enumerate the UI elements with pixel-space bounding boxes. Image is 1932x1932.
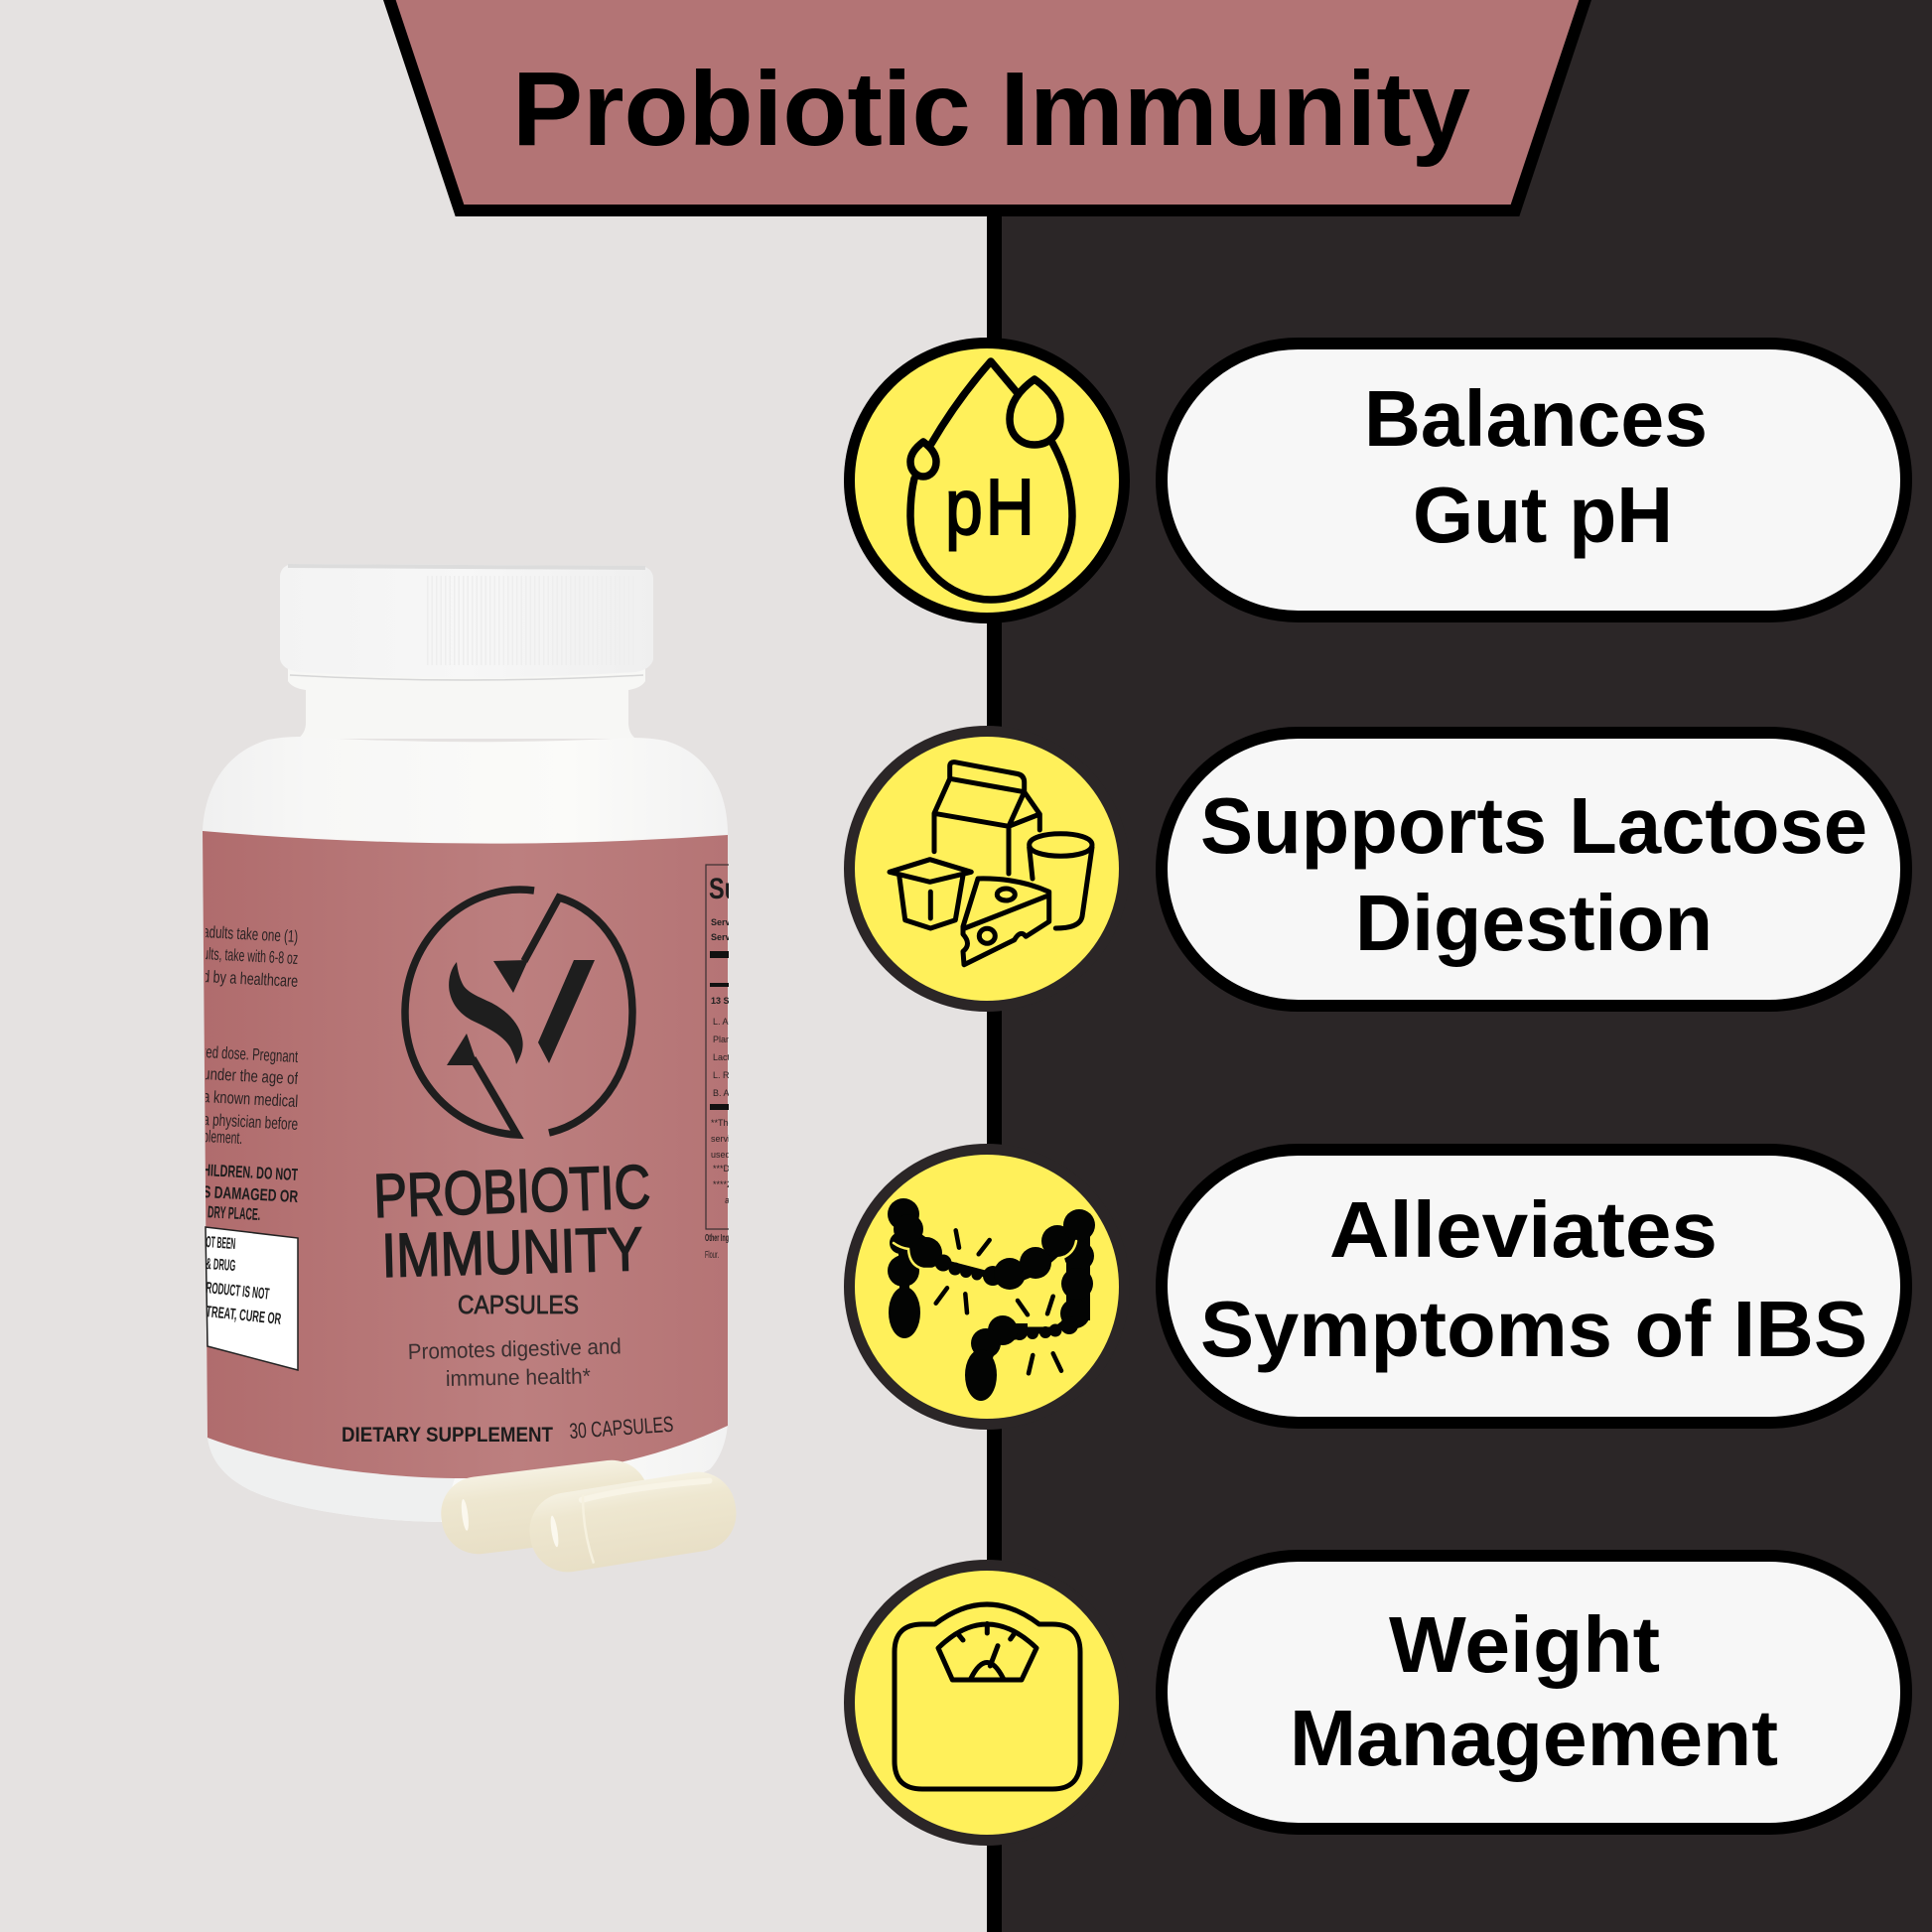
supplement facts panel: used for [711, 1150, 744, 1160]
bottle base shadow [207, 1438, 455, 1522]
icon: IBS colon circle [850, 1150, 1124, 1424]
directions small text: HILDREN. DO NOT [203, 1161, 299, 1184]
capsules label: CAPSULES [458, 1290, 579, 1319]
bottle neck [288, 667, 645, 739]
tagline: Promotes digestive and [407, 1333, 621, 1364]
supplement facts panel: Lactis [713, 1052, 737, 1062]
supplement facts panel: L. Acid [713, 1017, 740, 1027]
tagline [407, 1333, 621, 1391]
pill: alleviates symptoms of IBS: Alleviates [1329, 1185, 1718, 1274]
yogurt pot [890, 860, 971, 928]
tagline: immune health* [446, 1363, 591, 1391]
directions small text: , DRY PLACE. [203, 1202, 261, 1224]
pill: weight management: Management [1290, 1694, 1778, 1782]
logo [405, 890, 632, 1135]
supplement facts panel: Plantar [713, 1035, 742, 1044]
bottle body [203, 737, 728, 1522]
icon: dairy products circle [850, 731, 1124, 1007]
directions small text: ted dose. Pregnant [203, 1042, 299, 1066]
pain ticks [936, 1230, 1061, 1373]
supplement facts panel: ****20 B [713, 1179, 746, 1189]
FDA disclaimer box: TREAT, CURE OR [206, 1304, 282, 1328]
product bottle [203, 564, 749, 1578]
supplement facts panel [705, 864, 729, 1230]
pill: alleviates symptoms of IBS [1162, 1150, 1906, 1423]
FDA disclaimer box: & DRUG [206, 1256, 236, 1275]
icon: pH droplet circle [850, 344, 1124, 618]
supplement facts panel: B. Anim [713, 1088, 744, 1098]
milk carton [934, 762, 1039, 874]
colon highlights [894, 1241, 1076, 1269]
title: Probiotic Immunity [512, 51, 1470, 168]
right dark background [1002, 0, 1932, 1932]
dietary supplement: DIETARY SUPPLEMENT [342, 1424, 553, 1447]
icon: weighing scale circle [850, 1565, 1124, 1841]
other ingredients text: Other Ing [705, 1233, 729, 1244]
supplement facts panel: at [725, 1195, 733, 1205]
weighing scale [895, 1604, 1080, 1789]
product name: IMMUNITY [381, 1215, 643, 1291]
supplement facts panel: ***Daily [713, 1164, 744, 1173]
center divider line [987, 199, 1002, 1932]
directions small text: adults take one (1) [203, 922, 299, 946]
FDA disclaimer box: RODUCT IS NOT [206, 1280, 270, 1304]
pill: balances gut pH [1162, 344, 1906, 617]
directions small text: a known medical [203, 1087, 299, 1111]
FDA disclaimer box: OT BEEN [206, 1234, 236, 1253]
other ingredients text [705, 1233, 729, 1261]
directions small text: ults, take with 6-8 oz [203, 944, 299, 968]
left light background [0, 0, 993, 1932]
pill: alleviates symptoms of IBS: Symptoms of IBS [1200, 1285, 1867, 1373]
product name [372, 1153, 651, 1291]
directions small text: under the age of [203, 1064, 299, 1088]
directions small text: d by a healthcare [203, 967, 299, 991]
pH text: pH [945, 463, 1037, 551]
supplement facts panel: Serving [711, 932, 744, 942]
product name: PROBIOTIC [372, 1153, 651, 1231]
supplement facts panel: L. Reu [713, 1070, 740, 1080]
bottle cap [280, 564, 653, 680]
bottle label [203, 831, 749, 1478]
pill: supports lactose digestion: Digestion [1355, 879, 1713, 967]
supplement facts panel: Serving [711, 917, 744, 927]
supplement facts panel: serving [711, 1134, 740, 1144]
directions small text [203, 922, 299, 1224]
FDA disclaimer box [206, 1227, 298, 1370]
directions small text: S DAMAGED OR [203, 1182, 299, 1206]
directions small text: plement. [203, 1127, 243, 1148]
pill: supports lactose digestion: Supports Lactose [1200, 781, 1867, 870]
pill: supports lactose digestion [1162, 733, 1906, 1006]
supplement facts panel: 13 Strain [711, 996, 749, 1006]
colon [888, 1198, 1095, 1401]
capsule count: 30 CAPSULES [569, 1412, 674, 1444]
pill: weight management [1162, 1556, 1906, 1829]
pill: weight management: Weight [1389, 1600, 1660, 1689]
directions small text: a physician before [203, 1110, 299, 1134]
icon: pH droplet [910, 361, 1072, 600]
capsule back [437, 1455, 653, 1559]
title banner [386, 0, 1588, 210]
cup [1030, 834, 1092, 928]
supplement facts panel: **The % [711, 1118, 744, 1128]
capsule front [524, 1466, 742, 1578]
supplement facts panel: Su [709, 873, 739, 905]
pill: balances gut pH: Gut pH [1413, 471, 1673, 559]
pill: balances gut pH: Balances [1364, 374, 1708, 463]
cheese wedge [963, 879, 1049, 965]
other ingredients text: Flour. [705, 1250, 719, 1261]
